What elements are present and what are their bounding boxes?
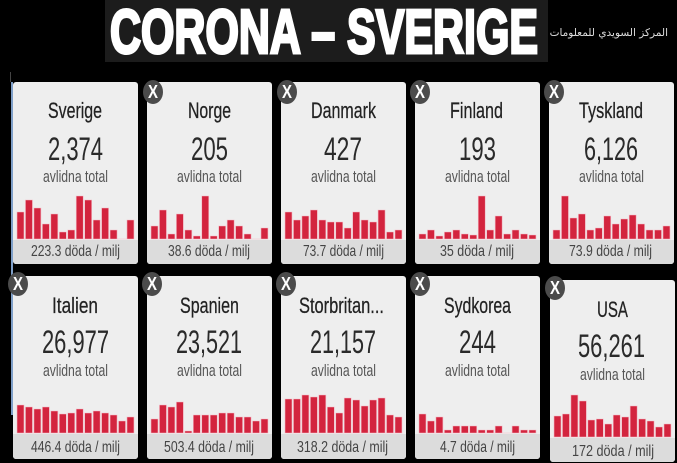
panel: Sydkorea: avlidna total (445, 361, 510, 380)
arabic caption: المركز السويدي للمعلومات (550, 27, 668, 39)
panel: Finland: avlidna total (445, 167, 510, 186)
icon: close Finland (410, 80, 430, 104)
icon: close Italien (8, 272, 28, 296)
panel: Sydkorea: 244 (459, 324, 496, 360)
bar chart: Spanien (151, 402, 268, 433)
panel: Danmark: 73.7 döda / milj (303, 243, 384, 260)
bar chart: Storbritannien (285, 395, 402, 433)
panel: Sverige: avlidna total (43, 167, 108, 186)
panel: USA: 172 döda / milj (572, 443, 654, 460)
icon: close Spanien (142, 272, 162, 296)
panel: Storbritannien: 318.2 döda / milj (297, 439, 388, 456)
panel: Tyskland: 6,126 (584, 131, 638, 167)
icon: close Spanien: X (147, 274, 157, 294)
panel: Spanien: 503.4 döda / milj (164, 439, 254, 456)
icon: close Sydkorea (410, 272, 430, 296)
panel: Italien: avlidna total (43, 361, 108, 380)
bar chart: Norge (151, 196, 268, 239)
panel: Sverige (13, 82, 138, 264)
panel: Sverige: 223.3 döda / milj (31, 243, 120, 260)
icon: close USA: X (550, 278, 560, 298)
bar chart: Tyskland (553, 196, 670, 239)
panel: Spanien: avlidna total (177, 361, 242, 380)
panel: Spanien (142, 272, 272, 459)
panel: Tyskland: Tyskland (579, 98, 643, 123)
panel: Finland: Finland (450, 98, 503, 123)
panel: Sydkorea: 4.7 döda / milj (440, 439, 515, 456)
icon: close Danmark (277, 80, 297, 104)
panel: Norge: Norge (188, 98, 231, 123)
panel: Storbritannien (276, 272, 406, 459)
panel: Tyskland: avlidna total (579, 167, 644, 186)
icon: close Italien: X (13, 274, 23, 294)
panel: Italien: 446.4 döda / milj (31, 439, 120, 456)
icon: close Finland: X (415, 82, 425, 102)
panel: Finland: 35 döda / milj (440, 243, 514, 260)
icon: close Norge (143, 80, 163, 104)
panel: Norge: 38.6 döda / milj (168, 243, 250, 260)
panel: Storbritannien: avlidna total (311, 361, 376, 380)
panel: USA: 56,261 (578, 328, 645, 364)
icon: close USA (545, 276, 565, 300)
panel: Norge (143, 80, 272, 264)
panel: Danmark: 427 (324, 131, 362, 167)
bar chart: Sverige (17, 196, 134, 239)
panel: Sydkorea: Sydkorea (444, 293, 512, 318)
panel: Sverige: 2,374 (48, 131, 103, 167)
panel: USA (545, 276, 675, 462)
panel: USA: USA (597, 297, 628, 322)
panel: Sydkorea (410, 272, 540, 459)
panel: USA: avlidna total (580, 365, 645, 384)
icon: close Danmark: X (282, 82, 292, 102)
panel: Danmark: avlidna total (311, 167, 376, 186)
panel: Danmark: Danmark (311, 98, 377, 123)
icon: close Sydkorea: X (415, 274, 425, 294)
bar chart: Finland (419, 196, 536, 239)
panel: Spanien: Spanien (180, 293, 239, 318)
panel: Norge: 205 (191, 131, 228, 167)
panel: Italien: Italien (52, 293, 98, 318)
bar chart: USA (554, 395, 671, 437)
icon: close Tyskland: X (549, 82, 559, 102)
panel: Italien: 26,977 (42, 324, 109, 360)
panel: Tyskland (544, 80, 674, 264)
bar chart: Danmark (285, 210, 402, 239)
panel: Finland (410, 80, 540, 264)
icon: close Norge: X (148, 82, 158, 102)
panel: Tyskland: 73.9 döda / milj (569, 243, 652, 260)
bar chart: Italien (17, 405, 134, 433)
icon: close Storbritannien: X (281, 274, 291, 294)
panel: Norge: avlidna total (177, 167, 242, 186)
panel: Sverige: Sverige (48, 98, 102, 123)
bar chart: Sydkorea (419, 414, 536, 433)
icon: close Storbritannien (276, 272, 296, 296)
panel: Italien (8, 272, 138, 459)
panel: Storbritannien: Storbritan... (299, 293, 384, 318)
panel: Danmark (277, 80, 406, 264)
icon: close Tyskland (544, 80, 564, 104)
panel: Spanien: 23,521 (176, 324, 242, 360)
panel: Finland: 193 (459, 131, 496, 167)
panel: Storbritannien: 21,157 (310, 324, 376, 360)
